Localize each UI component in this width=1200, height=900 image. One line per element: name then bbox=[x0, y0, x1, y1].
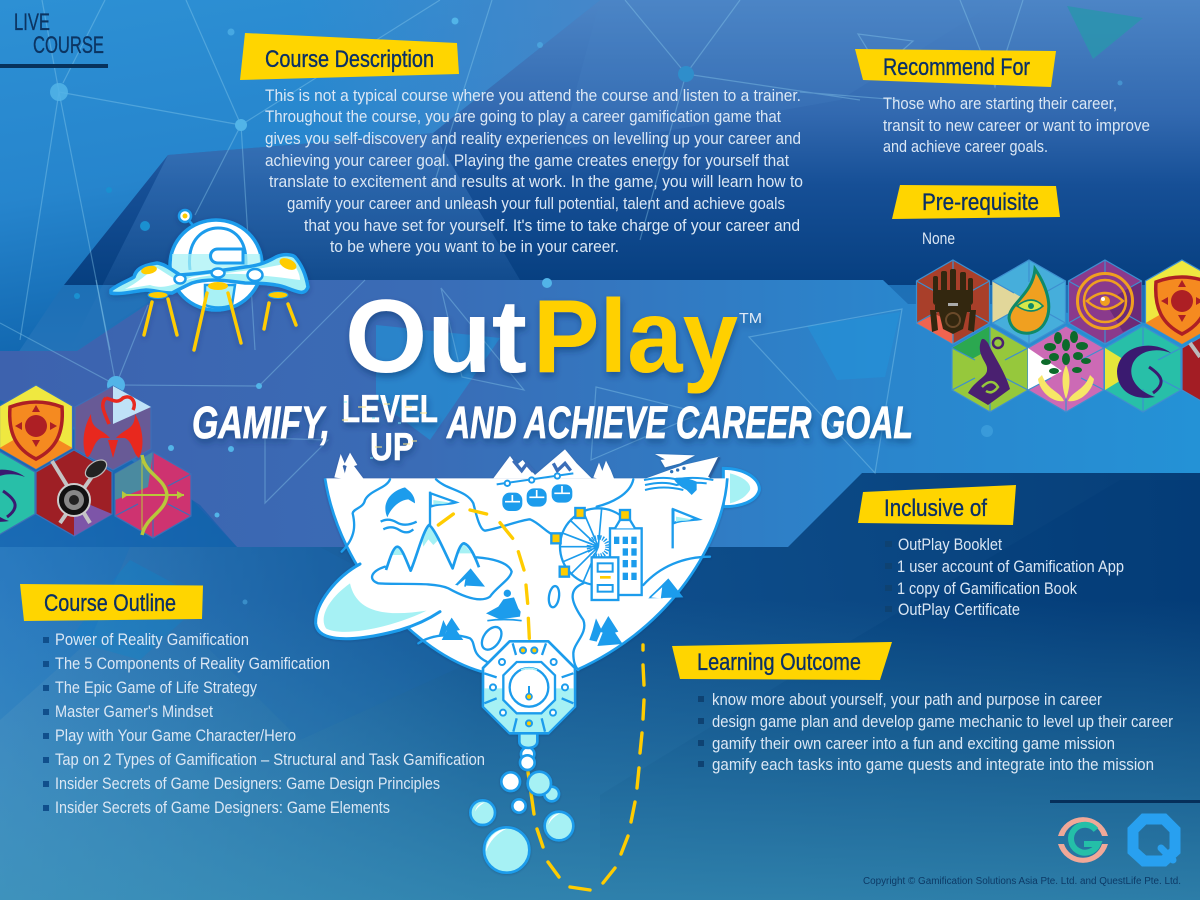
subtitle: GAMIFY, bbox=[192, 397, 330, 448]
title: OutPlay: Out bbox=[345, 279, 527, 395]
badge: gauntlet bbox=[916, 260, 990, 344]
outcome list: gamify each tasks into game quests and integrate into the mission bbox=[712, 755, 1154, 774]
gondola bbox=[497, 473, 573, 511]
live course label: COURSE bbox=[33, 32, 104, 59]
subtitle: UP bbox=[370, 426, 414, 469]
illustration: game world island bbox=[316, 449, 759, 873]
description text: translate to excitement and results at work. In the game, you will learn how to bbox=[269, 172, 803, 191]
description text: gamify your career and unleash your full potential, talent and achieve goals bbox=[287, 194, 785, 213]
outline list bbox=[43, 630, 485, 817]
icon: ufo bbox=[111, 210, 308, 350]
title: OutPlay: Play bbox=[533, 279, 738, 395]
outline list: The Epic Game of Life Strategy bbox=[55, 678, 257, 697]
map lines bbox=[342, 479, 710, 670]
heading: course outline bbox=[20, 584, 203, 621]
inclusive list: OutPlay Booklet bbox=[898, 535, 1002, 554]
outline list: Tap on 2 Types of Gamification – Structural and Task Gamification bbox=[55, 750, 485, 769]
heading: course outline: Course Outline bbox=[44, 590, 176, 617]
heading: inclusive of: Inclusive of bbox=[884, 495, 987, 522]
badge: leaf eye bbox=[992, 260, 1066, 344]
left ring bbox=[316, 564, 440, 639]
hexagon badges: right cluster bbox=[916, 260, 1200, 412]
description text: achieving your career goal. Playing the game creates energy for yourself that bbox=[265, 151, 789, 170]
pre-requisite text: None bbox=[922, 229, 955, 248]
description text bbox=[265, 86, 803, 256]
recommend text: transit to new career or want to improve bbox=[883, 116, 1150, 135]
title: OutPlay bbox=[345, 279, 762, 395]
description text: gives you self-discovery and reality experiences on levelling up your career and bbox=[265, 129, 801, 148]
outline list: Play with Your Game Character/Hero bbox=[55, 726, 296, 745]
badge: red partial bbox=[1182, 326, 1200, 412]
outline list: Power of Reality Gamification bbox=[55, 630, 249, 649]
live course label: LIVE bbox=[14, 9, 50, 36]
heading: course description bbox=[240, 33, 459, 80]
badge: sun shield bbox=[1146, 260, 1200, 344]
recommend text: and achieve career goals. bbox=[883, 137, 1048, 156]
badge: tree hands bbox=[1028, 326, 1104, 412]
heading: recommend for bbox=[855, 49, 1056, 87]
badge: scorpion mask bbox=[75, 386, 151, 470]
badge: crescent swirl bbox=[1105, 326, 1181, 412]
copyright: Copyright © Gamification Solutions Asia Pte. Ltd. and QuestLife Pte. Ltd. bbox=[863, 876, 1181, 887]
outcome list: gamify their own career into a fun and exciting game mission bbox=[712, 734, 1115, 753]
logo: Q bbox=[1133, 819, 1175, 861]
panel: course outline bbox=[20, 584, 485, 817]
description text: to be where you want to be in your career. bbox=[330, 237, 619, 256]
title: OutPlay: TM bbox=[739, 310, 762, 327]
description text: Throughout the course, you are going to play a career gamification game that bbox=[265, 107, 781, 126]
logo: G bbox=[1058, 817, 1108, 863]
subtitle bbox=[192, 388, 913, 469]
heading: recommend for: Recommend For bbox=[883, 54, 1030, 81]
inclusive list: 1 copy of Gamification Book bbox=[897, 579, 1077, 598]
dashed route upper bbox=[438, 510, 529, 638]
network lines bbox=[0, 0, 1122, 604]
badge: shield and weapons bbox=[36, 450, 112, 536]
octagon device bbox=[483, 641, 575, 748]
silhouettes above island bbox=[334, 449, 719, 479]
outline list: Insider Secrets of Game Designers: Game Design Principles bbox=[55, 774, 440, 793]
outcome list: know more about yourself, your path and purpose in career bbox=[712, 690, 1102, 709]
badge: sun shield bbox=[0, 385, 72, 469]
yellow dashed route: lower bbox=[528, 645, 644, 890]
badge: eye rings bbox=[1068, 260, 1142, 344]
island body bbox=[325, 478, 727, 677]
inclusive list bbox=[885, 535, 1124, 619]
panel: course description bbox=[240, 33, 803, 256]
panel: pre-requisite bbox=[892, 185, 1060, 248]
badge: purple flame bbox=[952, 326, 1028, 412]
panel: inclusive of bbox=[858, 485, 1124, 619]
description text: that you have set for yourself. It's time to take charge of your career and bbox=[304, 216, 800, 235]
heading: pre-requisite bbox=[892, 185, 1060, 219]
recommend text: Those who are starting their career, bbox=[883, 94, 1117, 113]
dolphin bbox=[381, 487, 417, 532]
live course label bbox=[0, 9, 108, 68]
description text: This is not a typical course where you attend the course and listen to a trainer. bbox=[265, 86, 801, 105]
heading: inclusive of bbox=[858, 485, 1016, 525]
badge: bow bbox=[115, 452, 191, 538]
heading: learning outcome: Learning Outcome bbox=[697, 649, 861, 676]
panel: learning outcome bbox=[672, 642, 1173, 774]
panel: recommend for bbox=[855, 49, 1150, 156]
recommend text bbox=[883, 94, 1150, 156]
subtitle: AND ACHIEVE CAREER GOAL bbox=[446, 397, 913, 448]
outcome list bbox=[698, 690, 1173, 774]
right ring bbox=[723, 468, 759, 507]
heading: pre-requisite: Pre-requisite bbox=[922, 189, 1039, 216]
boat waves bbox=[644, 478, 713, 495]
heading: course description: Course Description bbox=[265, 46, 434, 73]
mountains bbox=[386, 525, 479, 571]
inclusive list: OutPlay Certificate bbox=[898, 600, 1020, 619]
pine trees bbox=[438, 616, 623, 646]
outline list: The 5 Components of Reality Gamification bbox=[55, 654, 330, 673]
heading: learning outcome bbox=[672, 642, 892, 680]
inclusive list: 1 user account of Gamification App bbox=[897, 557, 1124, 576]
jet ski bbox=[486, 590, 522, 621]
badge: teal swirl bbox=[0, 450, 35, 536]
hexagon badges: left cluster bbox=[0, 385, 191, 538]
bubbles bbox=[470, 747, 573, 873]
outline list: Insider Secrets of Game Designers: Game Elements bbox=[55, 798, 390, 817]
ferris wheel bbox=[551, 508, 637, 585]
subtitle: LEVEL bbox=[342, 388, 438, 431]
buildings bbox=[592, 520, 642, 600]
footer bbox=[863, 800, 1200, 887]
outline list: Master Gamer's Mindset bbox=[55, 702, 213, 721]
tents bbox=[455, 568, 683, 598]
flags bbox=[430, 492, 698, 548]
